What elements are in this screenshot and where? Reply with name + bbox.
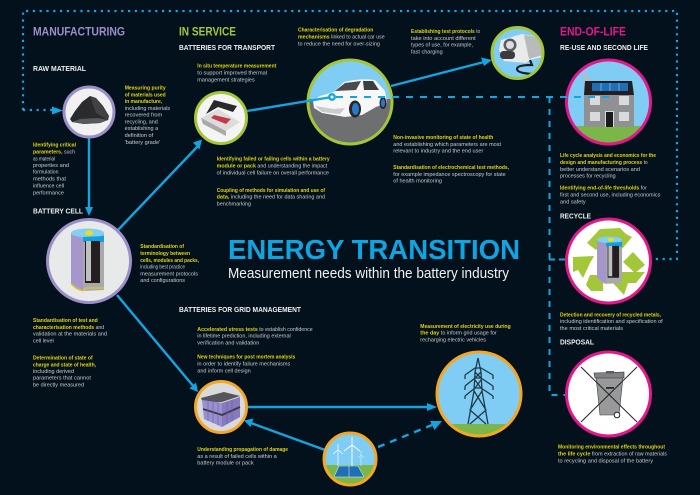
- text: accelerated stress tests: [197, 327, 313, 347]
- text: measuring purity: of materials used: [125, 92, 166, 98]
- dashed line: re-use and recycling path: [336, 97, 610, 395]
- circle: charger: [492, 28, 546, 78]
- text: standardisation of terminology: terminology between: [140, 251, 190, 257]
- heading: in service: IN SERVICE: [179, 24, 236, 38]
- text: accelerated stress tests: in lifetime prediction, including external: [197, 334, 291, 340]
- text: post mortem analysis: [197, 355, 295, 374]
- text: measuring purity: in manufacture,: [125, 99, 163, 105]
- heading: battery cell: BATTERY CELL: [33, 208, 84, 216]
- text: failed cells: Identifying failed or failing cells within a battery: [217, 157, 330, 163]
- text: life cycle analysis: design and manufacturing process to: [560, 160, 648, 166]
- text: failed cells: [217, 157, 330, 176]
- text: recovery of metals: the most critical materials: [560, 326, 623, 332]
- text: environmental effects: Monitoring environmental effects throughout: [558, 444, 665, 450]
- flow arrows: [89, 138, 432, 450]
- text: post mortem analysis: and inform cell design: [197, 368, 251, 374]
- title: Measurement needs within the battery industry: [228, 265, 509, 282]
- heading: recycle: RECYCLE: [560, 214, 591, 220]
- text: in situ temperature: [197, 64, 277, 83]
- text: test protocols: [411, 29, 480, 56]
- text: post mortem analysis: in order to identify failure mechanisms: [197, 361, 291, 367]
- text: test protocols: types of use, for example,: [411, 43, 473, 49]
- circle: battery cell: [48, 220, 130, 302]
- text: electricity use: Measurement of electricity use during: [420, 324, 511, 330]
- text: end-of-life thresholds: first and second use, including economics: [560, 192, 661, 198]
- heading: batteries for grid management: BATTERIES FOR GRID MANAGEMENT: [179, 307, 302, 314]
- text: critical parameters: properties and: [33, 163, 69, 169]
- text: recovery of metals: [560, 312, 663, 332]
- text: measuring purity: establishing a: [125, 126, 158, 132]
- connector: module to car: [247, 62, 484, 111]
- text: state of charge: parameters that cannot: [33, 376, 92, 382]
- text: accelerated stress tests: verification and validation: [197, 341, 259, 347]
- circle: recycle: [566, 219, 650, 303]
- text: test and characterisation: validation at the materials and: [33, 332, 107, 338]
- text: measuring purity: definition of: [125, 133, 154, 139]
- text: life cycle analysis: processes for recycling: [560, 174, 616, 180]
- text: degradation mechanisms: mechanisms linked to actual car use: [298, 34, 385, 40]
- dotted boundary line: [23, 11, 677, 259]
- text: post mortem analysis: New techniques for post mortem analysis: [197, 355, 295, 361]
- text: coupling of methods: [217, 188, 325, 208]
- circle: car: [306, 58, 394, 146]
- text: standardisation of terminology: cells, modules and packs,: [140, 258, 199, 264]
- text: measuring purity: recycling, and: [125, 120, 158, 126]
- text: propagation of damage: Understanding propagation of damage: [197, 447, 288, 453]
- text: degradation mechanisms: Characterisation of degradation: [298, 28, 373, 34]
- heading: disposal: DISPOSAL: [560, 340, 595, 346]
- text: end-of-life thresholds: [560, 186, 661, 205]
- circle: disposal: [566, 352, 650, 436]
- text: degradation mechanisms: to reduce the need for over-sizing: [298, 41, 380, 47]
- circle: battery module: [196, 92, 246, 144]
- text: propagation of damage: battery module or pack: [197, 461, 254, 467]
- text: environmental effects: the life cycle from extraction of raw materials: [558, 452, 667, 458]
- text: measuring purity: Measuring purity: [125, 86, 166, 92]
- text: recovery of metals: Detection and recovery of recycled metals,: [560, 312, 661, 318]
- text: test and characterisation: Standardisation of test and: [33, 318, 98, 324]
- heading: manufacturing: MANUFACTURING: [33, 24, 125, 38]
- text: environmental effects: to recycling and disposal of the battery: [558, 458, 653, 464]
- text: critical parameters: parameters, such: [33, 150, 75, 156]
- arrowhead: car to charger: [481, 58, 492, 66]
- text: coupling of methods: Coupling of methods for simulation and use of: [217, 188, 325, 194]
- text: non-invasive monitoring: Non-invasive monitoring of state of health: [393, 135, 493, 141]
- title: ENERGY TRANSITION: [228, 234, 520, 265]
- text: standardisation of terminology: and configurations: [140, 278, 185, 284]
- text: state of charge: including derived: [33, 369, 74, 375]
- text: life cycle analysis: Life cycle analysis and economics for the: [560, 153, 656, 159]
- text: measuring purity: recovered from: [125, 113, 163, 119]
- text: non-invasive monitoring: relevant to industry and the end user: [393, 149, 484, 155]
- text: electricity use: recharging electric vehicles: [420, 337, 486, 343]
- text: electrochemical methods: Standardisation of electrochemical test methods,: [393, 165, 509, 171]
- text: test protocols: fast charging: [411, 50, 443, 56]
- text: measuring purity: including materials: [125, 106, 171, 112]
- text: recovery of metals: including identification and specification of: [560, 319, 663, 325]
- text: life cycle analysis: [560, 153, 656, 180]
- circle: grid battery pack: [196, 382, 246, 432]
- text: life cycle analysis: better understand scenarios and: [560, 167, 640, 173]
- text: coupling of methods: data, including the need for data sharing and: [217, 195, 325, 201]
- circle: renewables: [322, 432, 378, 486]
- text: electrochemical methods: for example impedance spectroscopy for state: [393, 172, 506, 178]
- text: accelerated stress tests: Accelerated stress tests to establish confidence: [197, 327, 313, 333]
- text: coupling of methods: benchmarking: [217, 202, 251, 208]
- text: electricity use: the day to inform grid usage for: [420, 331, 497, 337]
- text: critical parameters: methods that: [33, 177, 67, 183]
- text: failed cells: module or pack and understanding the impact: [217, 163, 328, 169]
- circle: pylon: [436, 350, 522, 438]
- text: standardisation of terminology: Standardisation of: [140, 244, 184, 250]
- text: in situ temperature: to support improved thermal: [197, 71, 267, 77]
- arrow: into raw material: [52, 106, 63, 114]
- heading: end of life: END-OF-LIFE: [560, 24, 626, 38]
- text: critical parameters: Identifying critical: [33, 143, 76, 149]
- heading: batteries for transport: BATTERIES FOR TRANSPORT: [179, 45, 276, 52]
- circle: raw material: [64, 87, 114, 137]
- text: state of charge: Determination of state of: [33, 355, 93, 361]
- text: critical parameters: influence cell: [33, 183, 64, 189]
- text: measuring purity: [125, 86, 171, 146]
- text: critical parameters: as material: [33, 156, 55, 162]
- circle: house: [565, 58, 652, 146]
- text: measuring purity: 'battery grade': [125, 140, 160, 146]
- text: test and characterisation: [33, 318, 107, 344]
- title: [228, 234, 520, 282]
- text: standardisation of terminology: [140, 244, 199, 284]
- text: critical parameters: performance: [33, 190, 64, 196]
- text: propagation of damage: as a result of failed cells within a: [197, 454, 277, 460]
- text: test protocols: Establishing test protocols to: [411, 29, 480, 35]
- text: end-of-life thresholds: and safety: [560, 199, 586, 205]
- text: critical parameters: formulation: [33, 170, 59, 176]
- text: failed cells: of individual cell failure on overall performance: [217, 170, 329, 176]
- text: standardisation of terminology: including best practice: [140, 265, 185, 271]
- text: test and characterisation: cell level: [33, 338, 54, 344]
- text: test and characterisation: characterisation methods and: [33, 325, 104, 331]
- text: electrochemical methods: [393, 165, 509, 185]
- text: electrochemical methods: of health monitoring: [393, 179, 442, 185]
- arrowheads: [85, 140, 442, 430]
- text: state of charge: charge and state of health,: [33, 362, 96, 368]
- text: electricity use: [420, 324, 511, 343]
- text: standardisation of terminology: measurement protocols: [140, 271, 198, 277]
- text: state of charge: [33, 355, 96, 389]
- text: in situ temperature: management strategies: [197, 77, 255, 83]
- text: end-of-life thresholds: Identifying end-of-life thresholds for: [560, 186, 647, 192]
- text: non-invasive monitoring: [393, 135, 502, 155]
- heading: raw material: RAW MATERIAL: [33, 66, 87, 73]
- text: non-invasive monitoring: and establishing which parameters are most: [393, 142, 502, 148]
- text: environmental effects: [558, 444, 667, 464]
- text: propagation of damage: [197, 447, 288, 467]
- text: test protocols: take into account different: [411, 36, 476, 42]
- text: critical parameters: [33, 143, 76, 196]
- text: degradation mechanisms: [298, 28, 385, 47]
- text: in situ temperature: In situ temperature measurement: [197, 64, 277, 70]
- text: state of charge: be directly measured: [33, 383, 84, 389]
- heading: re-use and second life: RE-USE AND SECOND LIFE: [560, 45, 648, 52]
